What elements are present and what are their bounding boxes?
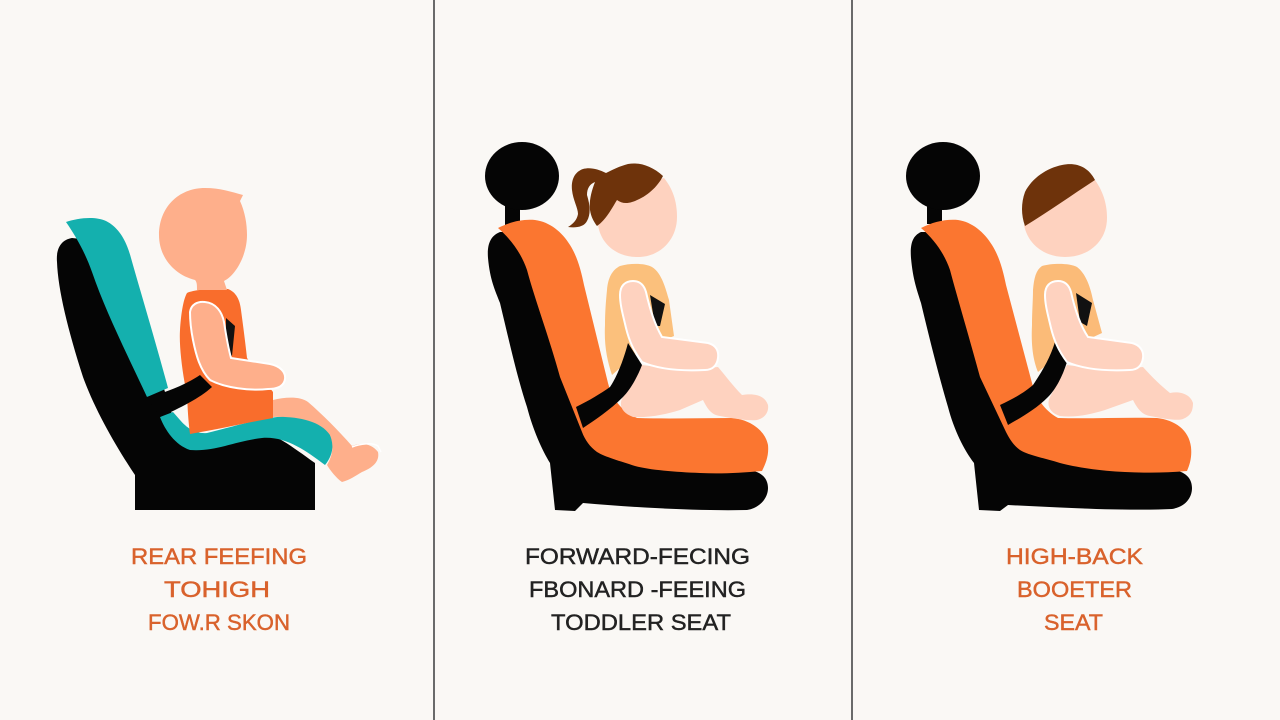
icon: child legs and torso (621, 365, 768, 420)
icon: black seat shell (57, 238, 315, 510)
label: high-back booster: BOOETER (1017, 577, 1132, 602)
icon: headrest (505, 205, 520, 226)
icon: black seat shell (911, 232, 1192, 511)
icon: headrest ball (906, 142, 980, 210)
panel: rear-facing seat (57, 188, 381, 510)
icon: headrest ball (485, 142, 559, 210)
icon: child face (1024, 180, 1107, 257)
icon: shoulder strap (226, 318, 235, 356)
icon: child legs (273, 398, 378, 482)
label: forward-facing (525, 544, 750, 635)
icon: orange child vest (180, 289, 273, 434)
icon: short brown hair (1022, 164, 1095, 226)
icon: peach shirt (1032, 264, 1102, 372)
label: rear-facing (131, 544, 307, 635)
label: forward-facing: TODDLER SEAT (551, 610, 731, 635)
icon: child arm (1045, 281, 1143, 370)
label: forward-facing: FBONARD -FEEING (529, 577, 746, 602)
icon: foot outline (352, 444, 381, 452)
icon: child face (598, 178, 677, 257)
icon: shoulder strap (1076, 293, 1092, 326)
icon: peach shirt (605, 264, 674, 375)
icon: child arm (190, 302, 285, 390)
panel: high-back booster (906, 142, 1193, 511)
icon: ponytail hair (568, 164, 663, 227)
icon: child head (159, 188, 247, 290)
icon: shoulder strap (650, 295, 665, 326)
panel: forward-facing seat (485, 142, 768, 511)
label: rear-facing: FOW.R SKON (148, 610, 290, 635)
icon: orange seat cushion (498, 220, 768, 473)
icon: child arm (620, 281, 718, 370)
label: high-back booster: HIGH-BACK (1006, 544, 1143, 569)
icon: black lap belt (1000, 342, 1067, 425)
icon: black lap belt (576, 343, 642, 428)
icon: teal seat liner (66, 218, 333, 465)
label: forward-facing: FORWARD-FECING (525, 544, 750, 569)
label: high-back booster: SEAT (1044, 610, 1103, 635)
icon: black lap belt (147, 375, 212, 417)
label: high-back booster (1006, 544, 1143, 635)
icon: headrest stem (927, 205, 942, 224)
icon: orange seat cushion (921, 220, 1191, 473)
icon: child legs and torso (1048, 365, 1193, 420)
label: rear-facing: TOHIGH (164, 577, 270, 602)
label: rear-facing: REAR FEEFING (131, 544, 307, 569)
icon: black seat shell (488, 232, 768, 511)
